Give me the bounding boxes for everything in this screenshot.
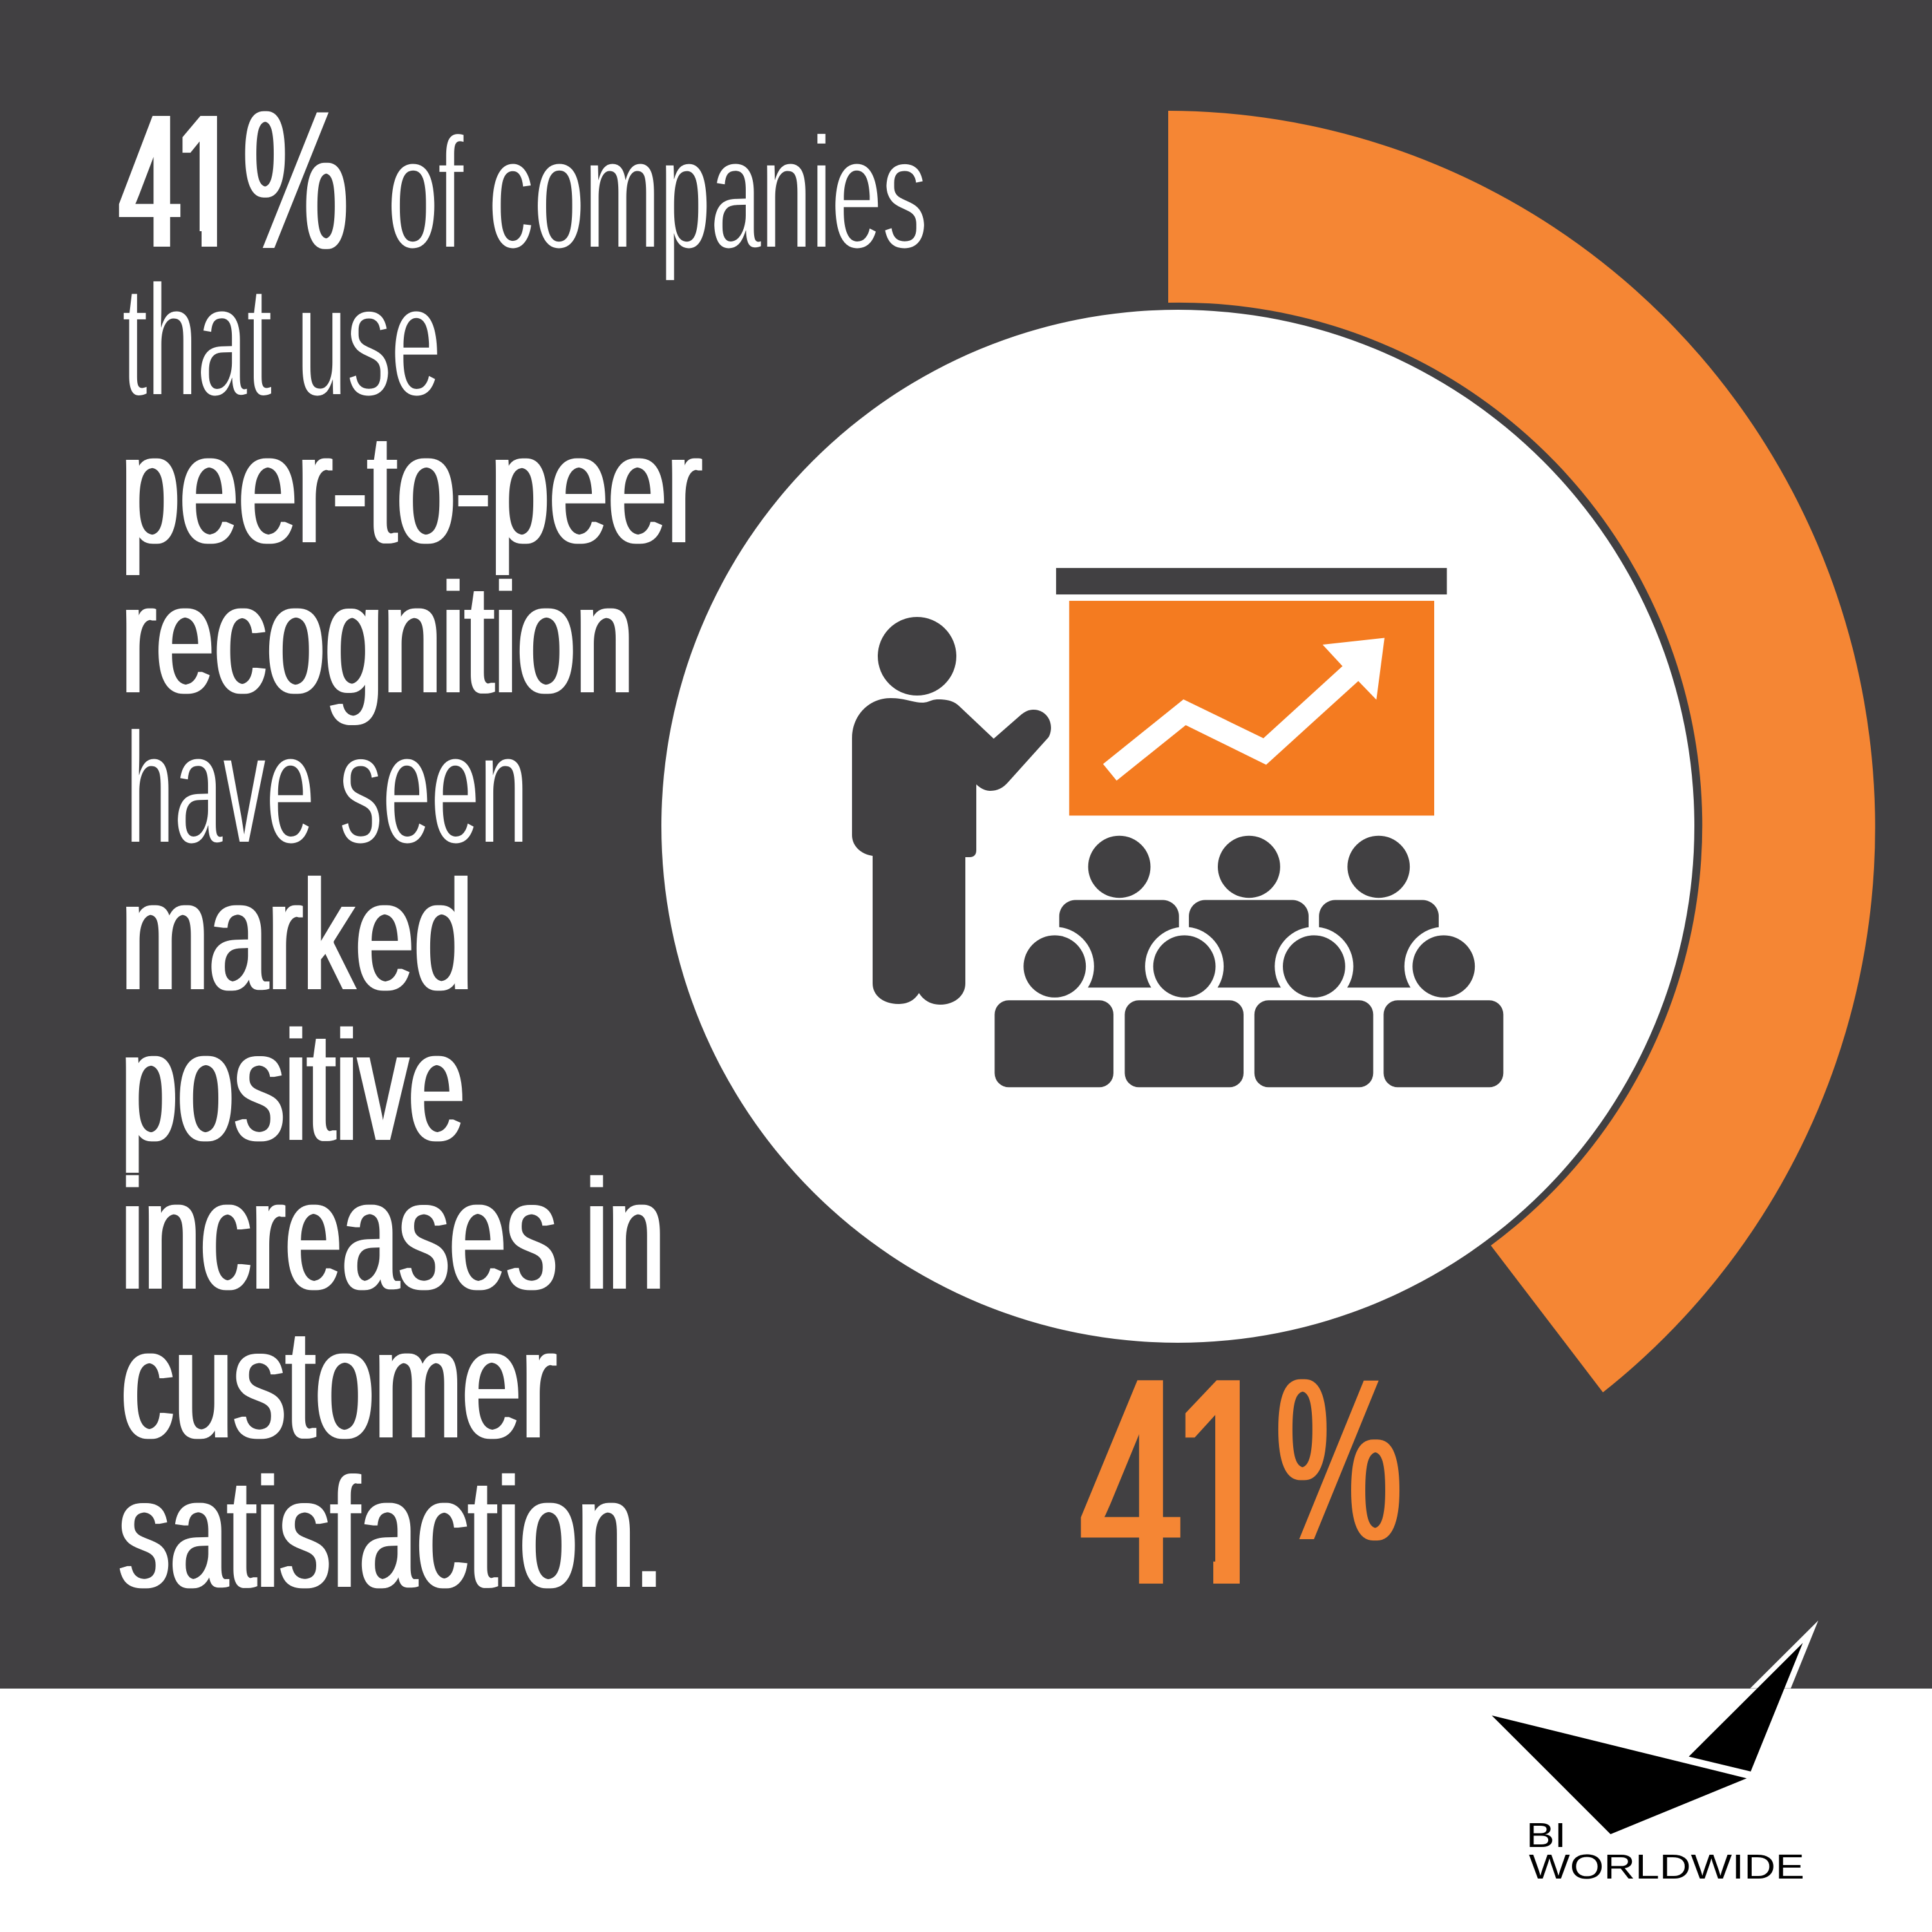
percent sign: % [242, 70, 349, 290]
percent sign: % [1275, 1331, 1403, 1588]
growth arrow [1103, 638, 1385, 781]
logo mark [1492, 1620, 1818, 1834]
orange screen [1069, 601, 1434, 815]
projection screen bar [1056, 568, 1447, 594]
logo wordmark: WORLDWIDE [1529, 1848, 1804, 1886]
satisfaction.: satisfaction. [118, 1444, 663, 1622]
digit 1: 1 [1171, 1316, 1278, 1647]
peer-to-peer: peer-to-peer [121, 400, 702, 577]
orange 41% arc [1168, 111, 1875, 1392]
recognition: recognition [121, 550, 634, 727]
logo wordmark [1526, 1816, 1804, 1886]
audience [994, 836, 1503, 1087]
icon: presenter and audience [852, 568, 1503, 1087]
stat digit 4: 4 [120, 75, 180, 287]
white circle [661, 310, 1694, 1343]
logo wordmark: BI [1526, 1816, 1566, 1855]
presenter [852, 617, 1051, 1005]
positive: positive [121, 998, 465, 1175]
headline text block [118, 70, 927, 1622]
of companies: of companies [388, 103, 927, 283]
large 41% label [1081, 1379, 1400, 1584]
that use: that use [122, 251, 441, 430]
have seen: have seen [126, 698, 528, 878]
stat digit 1: 1 [176, 75, 237, 287]
increases in: increases in [121, 1146, 665, 1323]
screen and audience group [994, 568, 1503, 1087]
digit 4: 4 [1081, 1316, 1181, 1647]
customer: customer [121, 1295, 556, 1472]
logo: BI Worldwide [1492, 1620, 1818, 1886]
marked: marked [121, 847, 473, 1024]
